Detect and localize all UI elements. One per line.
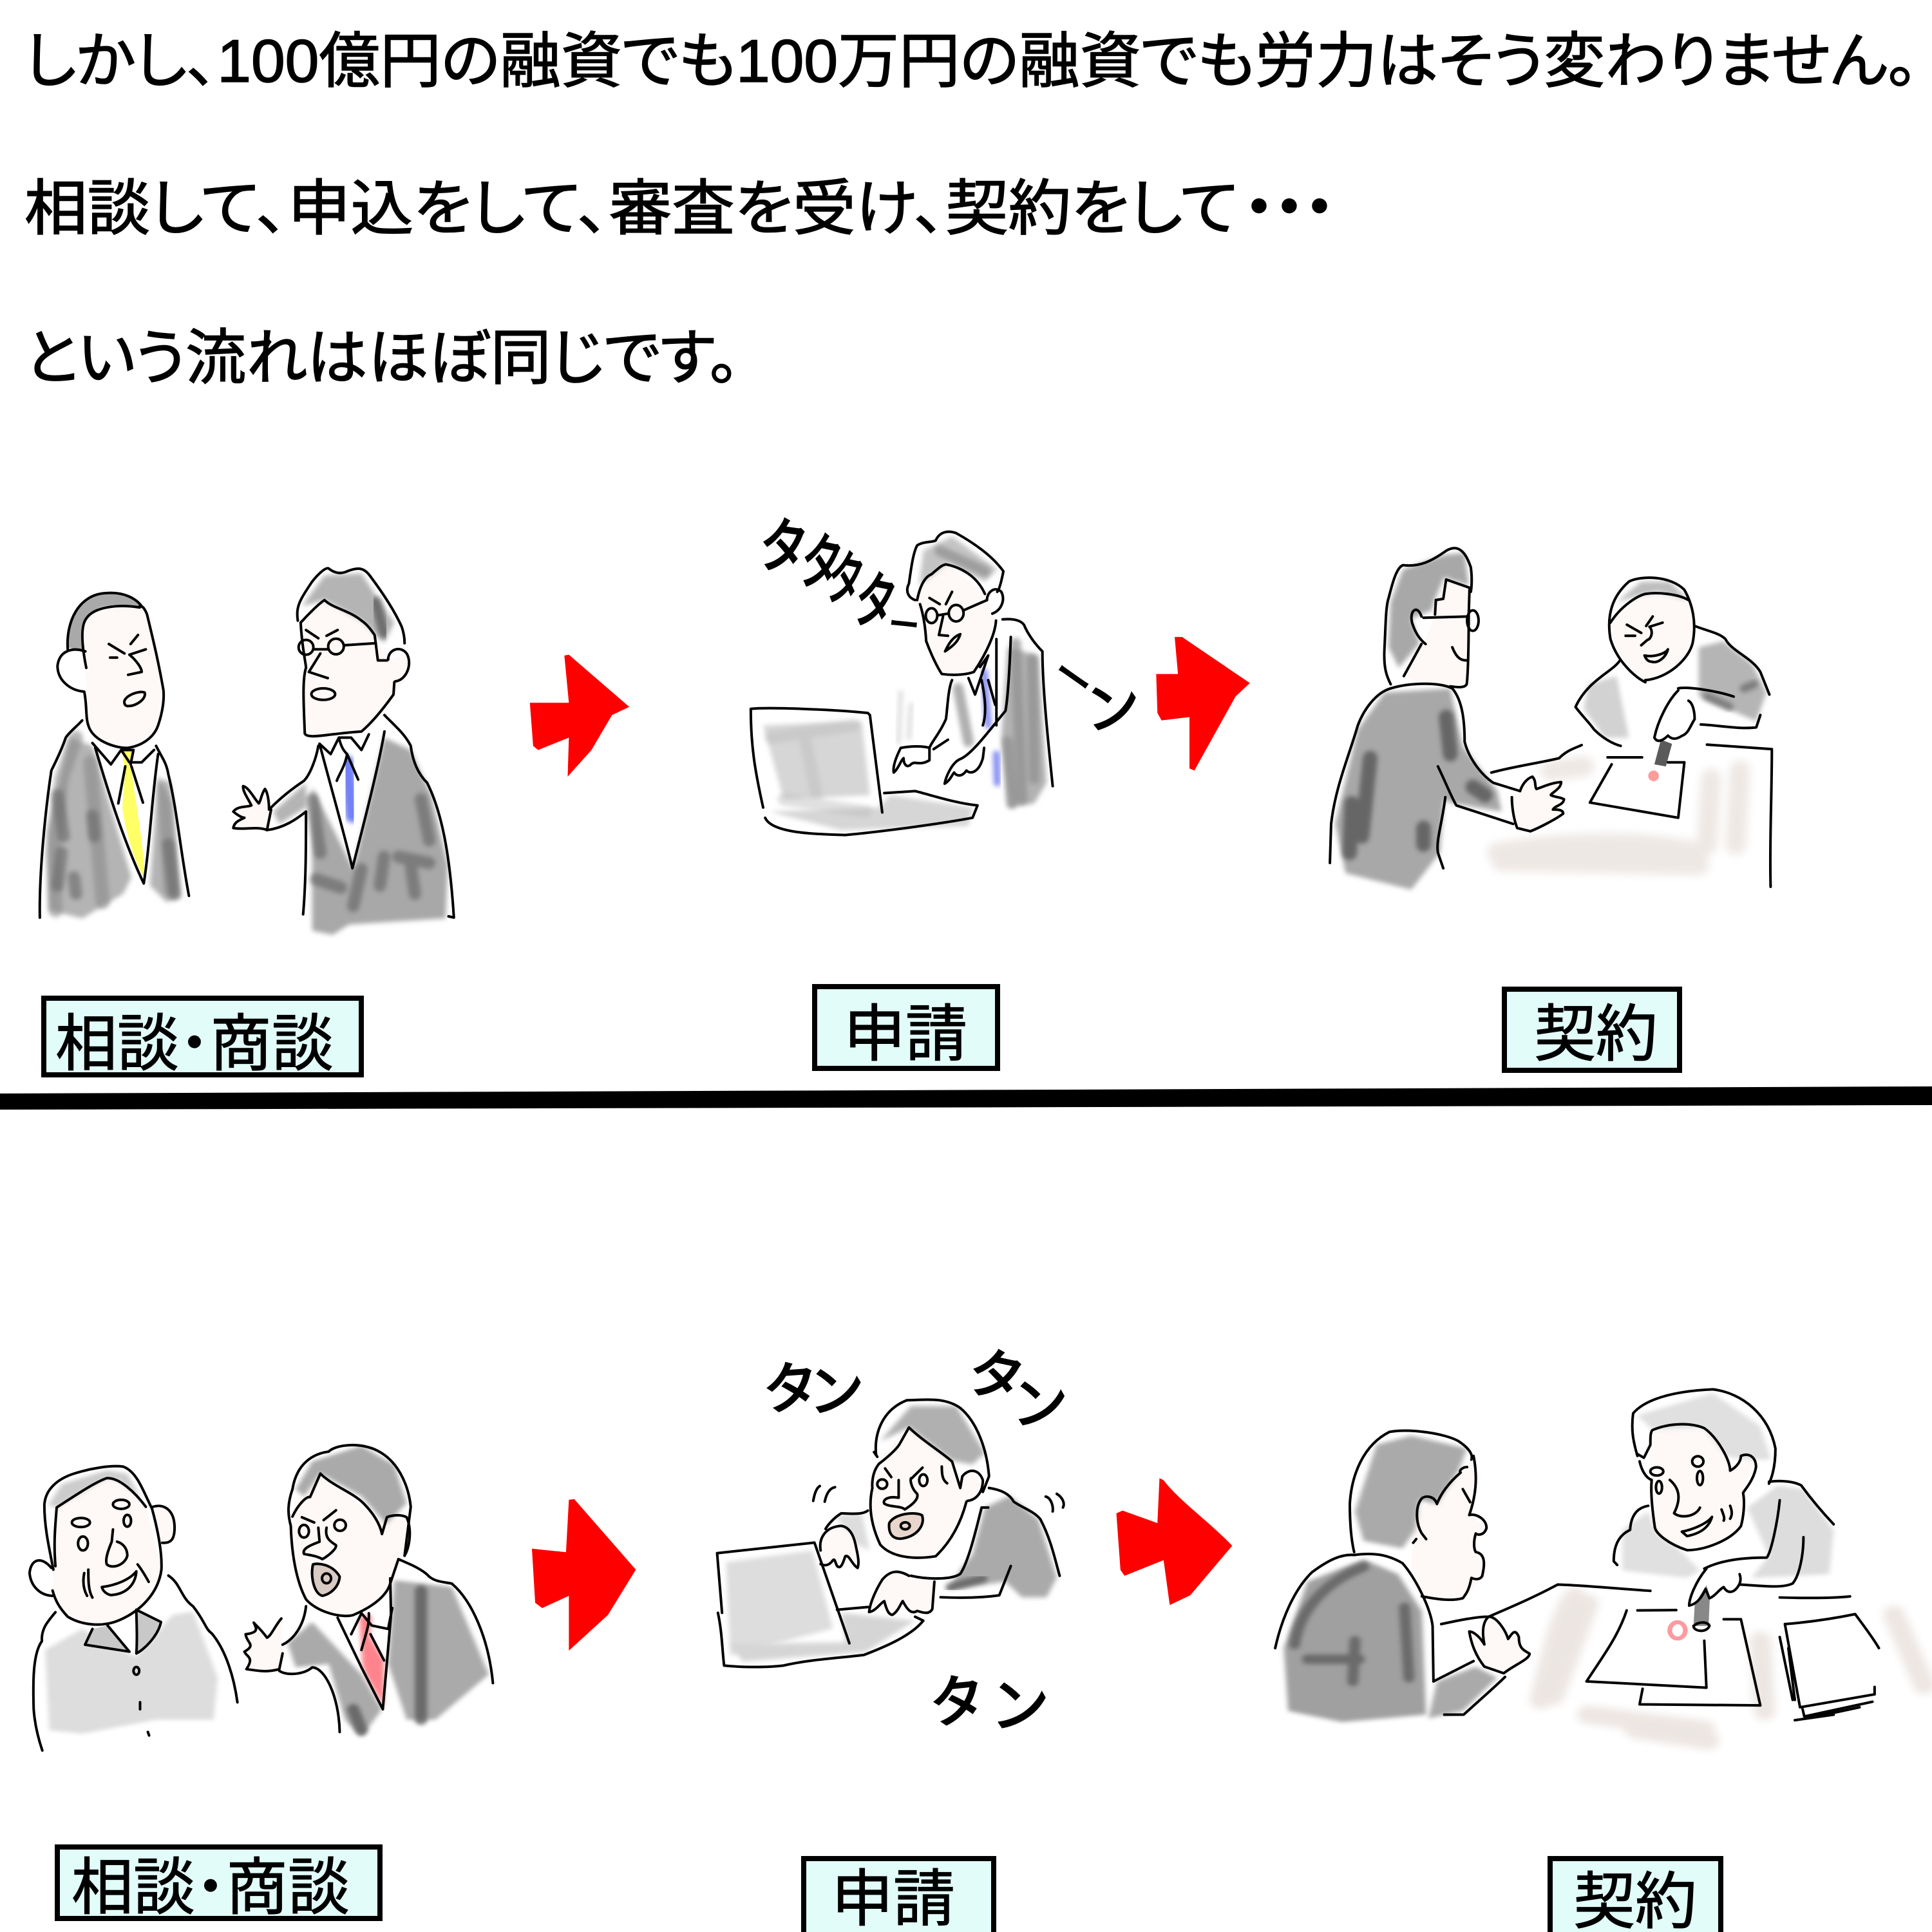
- typing sound effect top: [755, 496, 1143, 745]
- typing sound effect top: ン: [1081, 662, 1143, 745]
- typing sound effects bottom: タ: [760, 1341, 821, 1426]
- typing sound effect top: ー: [1043, 641, 1106, 710]
- label top 3: [1504, 989, 1680, 1070]
- typing sound effect top: ー: [887, 600, 921, 645]
- arrow 1 top: [530, 655, 629, 777]
- typing sound effects bottom: タ: [962, 1326, 1033, 1416]
- scene: application, small loan: [751, 532, 1053, 835]
- heading line 1: しかし、100億円の融資でも100万円の融資でも労力はそう変わりません。: [24, 27, 1918, 95]
- label bottom 3: [1550, 1859, 1721, 1932]
- scene: application, large loan: [717, 1399, 1064, 1667]
- typing sound effects bottom: ン: [808, 1345, 866, 1427]
- typing sound effect top: タ: [848, 547, 905, 646]
- typing sound effect top: タ: [755, 496, 814, 589]
- label bottom 2: [804, 1859, 994, 1932]
- label top 2: 申請: [844, 1000, 967, 1069]
- typing sound effects bottom: [760, 1326, 1068, 1743]
- label bottom 2: 申請: [831, 1865, 955, 1932]
- divider bar: [0, 1086, 1932, 1110]
- heading text: [24, 27, 1918, 392]
- label top 2: [815, 987, 998, 1069]
- heading line 2 dots: ･･･: [1240, 166, 1331, 252]
- heading line 3: という流れはほぼ同じです。: [24, 324, 739, 392]
- typing sound effects bottom: タ: [925, 1654, 989, 1739]
- typing sound effects bottom: ン: [1012, 1359, 1068, 1439]
- typing sound effect top: タ: [820, 528, 873, 621]
- typing sound effect top: タ: [793, 509, 851, 607]
- arrow 1 bottom: [532, 1499, 636, 1651]
- scene: contract, small loan: [1330, 548, 1772, 889]
- scene: contract, large loan: [1275, 1389, 1924, 1741]
- scene: consultation, large loan: [30, 1445, 493, 1750]
- label bottom 1: 相談･商談: [71, 1853, 350, 1922]
- arrow 2 bottom: [1116, 1478, 1232, 1605]
- arrow 2 top: [1156, 637, 1250, 770]
- heading line 2: 相談して、申込をして、審査を受け、契約をして: [24, 175, 1238, 242]
- label top 3: 契約: [1534, 1000, 1658, 1069]
- typing sound effects bottom: ン: [991, 1659, 1049, 1743]
- label top 1: 相談･商談: [55, 1010, 334, 1079]
- scene: consultation, small loan: [40, 568, 454, 935]
